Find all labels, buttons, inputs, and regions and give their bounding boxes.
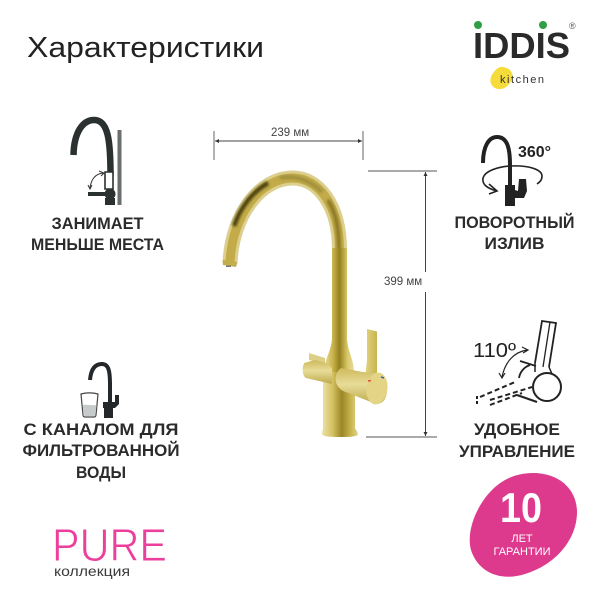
text: convenient control xyxy=(459,420,575,461)
badge: 10 year warranty: 10 xyxy=(500,484,542,531)
faucet base xyxy=(322,372,358,437)
text: filtered water channel: ФИЛЬТРОВАННОЙ xyxy=(22,441,180,460)
faucet left handle xyxy=(303,353,332,384)
icon: 360 degree swivel spout: 360° xyxy=(518,144,551,161)
text: takes up less space: МЕНЬШЕ МЕСТА xyxy=(31,235,164,254)
logo: IDDIS kitchen: ® xyxy=(569,21,576,31)
text: swivel spout xyxy=(454,213,574,253)
logo: PURE collection: коллекция xyxy=(54,563,130,579)
badge: 10 year warranty: ЛЕТ xyxy=(511,533,533,545)
faucet cylinder xyxy=(336,368,387,404)
title: Характеристики xyxy=(27,32,264,64)
logo: IDDIS kitchen: IDDIS xyxy=(473,25,570,66)
icon: 360 degree swivel spout xyxy=(483,137,551,206)
icon: faucet against wall xyxy=(74,120,122,205)
text: swivel spout: ПОВОРОТНЫЙ xyxy=(454,213,574,232)
icon: 110 degree lever xyxy=(473,321,561,405)
text: swivel spout: ИЗЛИВ xyxy=(484,234,544,253)
badge: 10 year warranty xyxy=(470,473,577,577)
text: takes up less space: ЗАНИМАЕТ xyxy=(52,214,144,233)
logo: PURE collection: PURE xyxy=(52,519,167,571)
icon: 110 degree lever: 110º xyxy=(473,340,517,362)
text: filtered water channel: ВОДЫ xyxy=(76,463,126,482)
faucet xyxy=(222,177,390,437)
icon: faucet with glass xyxy=(81,364,119,418)
faucet stem xyxy=(324,248,354,372)
text: filtered water channel: С КАНАЛОМ ДЛЯ xyxy=(24,420,178,439)
text: convenient control: УДОБНОЕ xyxy=(474,420,560,439)
dimension: width 239 mm xyxy=(214,127,363,160)
logo: IDDIS kitchen xyxy=(473,21,576,89)
text: convenient control: УПРАВЛЕНИЕ xyxy=(459,442,575,461)
badge: 10 year warranty: ГАРАНТИИ xyxy=(494,546,550,558)
dimension: height 399 mm xyxy=(366,171,437,437)
faucet spout xyxy=(222,177,340,267)
text: takes up less space xyxy=(31,214,164,254)
dimension: width 239 mm: 239 мм xyxy=(271,127,309,139)
text: filtered water channel xyxy=(22,420,180,482)
logo: IDDIS kitchen: kitchen xyxy=(500,74,544,86)
faucet right lever xyxy=(365,329,377,378)
dimension: height 399 mm: 399 мм xyxy=(384,276,422,288)
